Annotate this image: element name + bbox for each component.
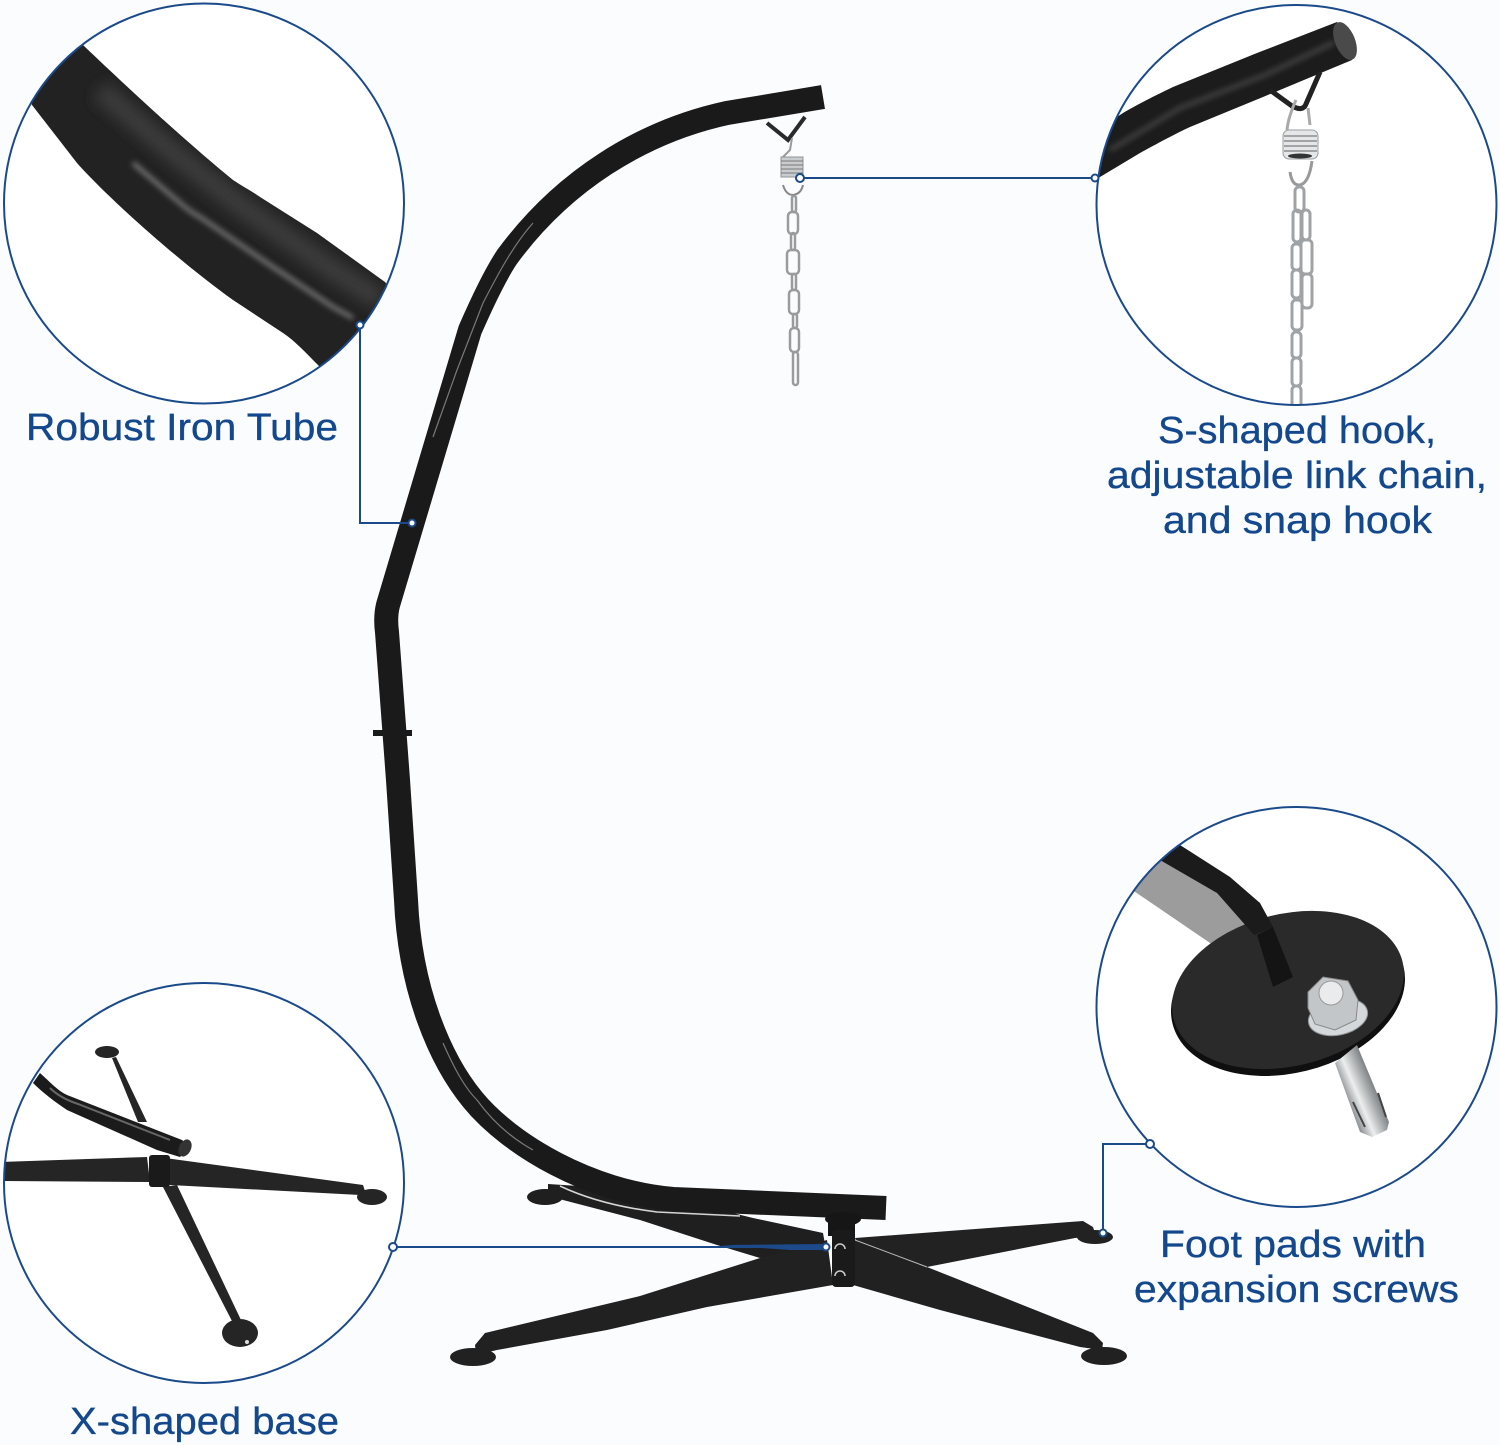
callout lines and dots	[356, 174, 1154, 1251]
tube close-up	[32, 45, 386, 366]
foot pad close-up	[1125, 845, 1422, 1137]
base: front left arm	[450, 1240, 833, 1366]
tube collar	[373, 730, 412, 736]
base hub with bolts	[825, 1212, 861, 1287]
label: foot pads: Foot pads with	[1160, 1224, 1426, 1266]
panel: x-shaped base detail circle	[0, 983, 404, 1383]
hook close-up	[1085, 19, 1362, 410]
panel: tube detail circle	[0, 0, 410, 410]
tube highlights	[433, 223, 740, 1216]
base: back left arm	[527, 1184, 826, 1258]
panel: foot pad detail circle	[1096, 807, 1496, 1207]
label: hook and chain	[1107, 410, 1487, 542]
label: hook and chain: S-shaped hook,	[1158, 410, 1436, 452]
label: x-shaped base: X-shaped base	[70, 1401, 339, 1443]
label: foot pads: expansion screws	[1134, 1269, 1459, 1311]
panel: hook and chain detail circle	[1085, 5, 1496, 410]
tube	[386, 97, 886, 1208]
label: foot pads	[1134, 1224, 1459, 1311]
base: front right arm	[853, 1240, 1127, 1365]
label: hook and chain: adjustable link chain,	[1107, 455, 1487, 497]
base: back right arm	[855, 1221, 1113, 1280]
label: hook and chain: and snap hook	[1163, 500, 1433, 542]
base close-up	[0, 1046, 387, 1347]
hanging hook and chain	[767, 117, 805, 385]
main C-shaped stand	[373, 97, 1127, 1366]
label: robust iron tube: Robust Iron Tube	[26, 407, 338, 449]
